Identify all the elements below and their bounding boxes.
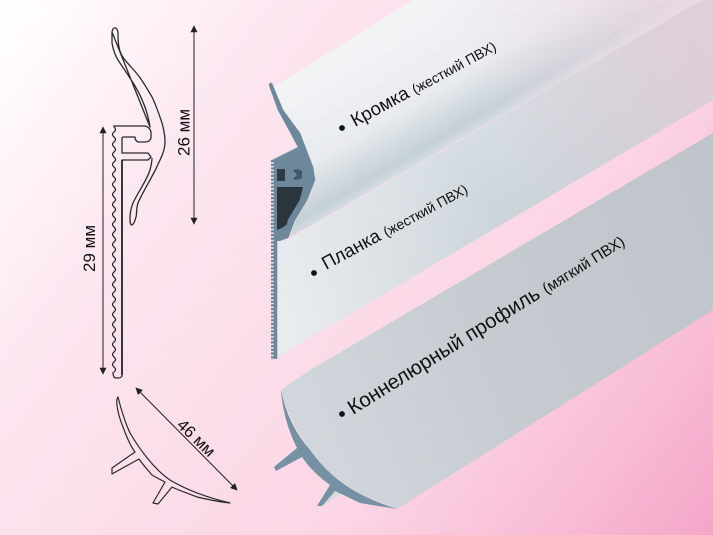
serrated plank edge: [112, 127, 116, 372]
panel: plank strip: [277, 0, 713, 357]
edge strip label: Кромка (жесткий ПВХ): [347, 35, 499, 131]
connector strip surface: [281, 133, 713, 509]
edge outline: [112, 28, 165, 225]
plank outline: [113, 126, 151, 378]
plank serrated edge: [271, 160, 274, 360]
plank cross-section: [272, 147, 305, 360]
drawing: connector section: [112, 397, 230, 504]
edge strip surface: [272, 0, 702, 238]
label: 46 mm: 46 мм: [173, 416, 219, 461]
label: 29 mm: 29 мм: [80, 225, 99, 272]
drawing: edge and plank section: [112, 28, 165, 378]
edge cross-section: [269, 83, 315, 238]
connector strip lower wedge: [320, 489, 344, 506]
plank strip surface: [277, 0, 713, 357]
arrow: 46 mm: [136, 388, 237, 490]
plank profile body: [272, 147, 305, 241]
panel: connector profile strip: [274, 133, 713, 509]
label: 26 mm: 26 мм: [174, 109, 194, 156]
connector strip cross-section: [274, 390, 397, 509]
plank strip label: Планка (жесткий ПВХ): [318, 177, 471, 274]
plank profile dark cavity: [277, 187, 303, 230]
connector strip label: Коннелюрный профиль (мягкий ПВХ): [344, 230, 629, 419]
panel: edge strip: [272, 0, 702, 238]
